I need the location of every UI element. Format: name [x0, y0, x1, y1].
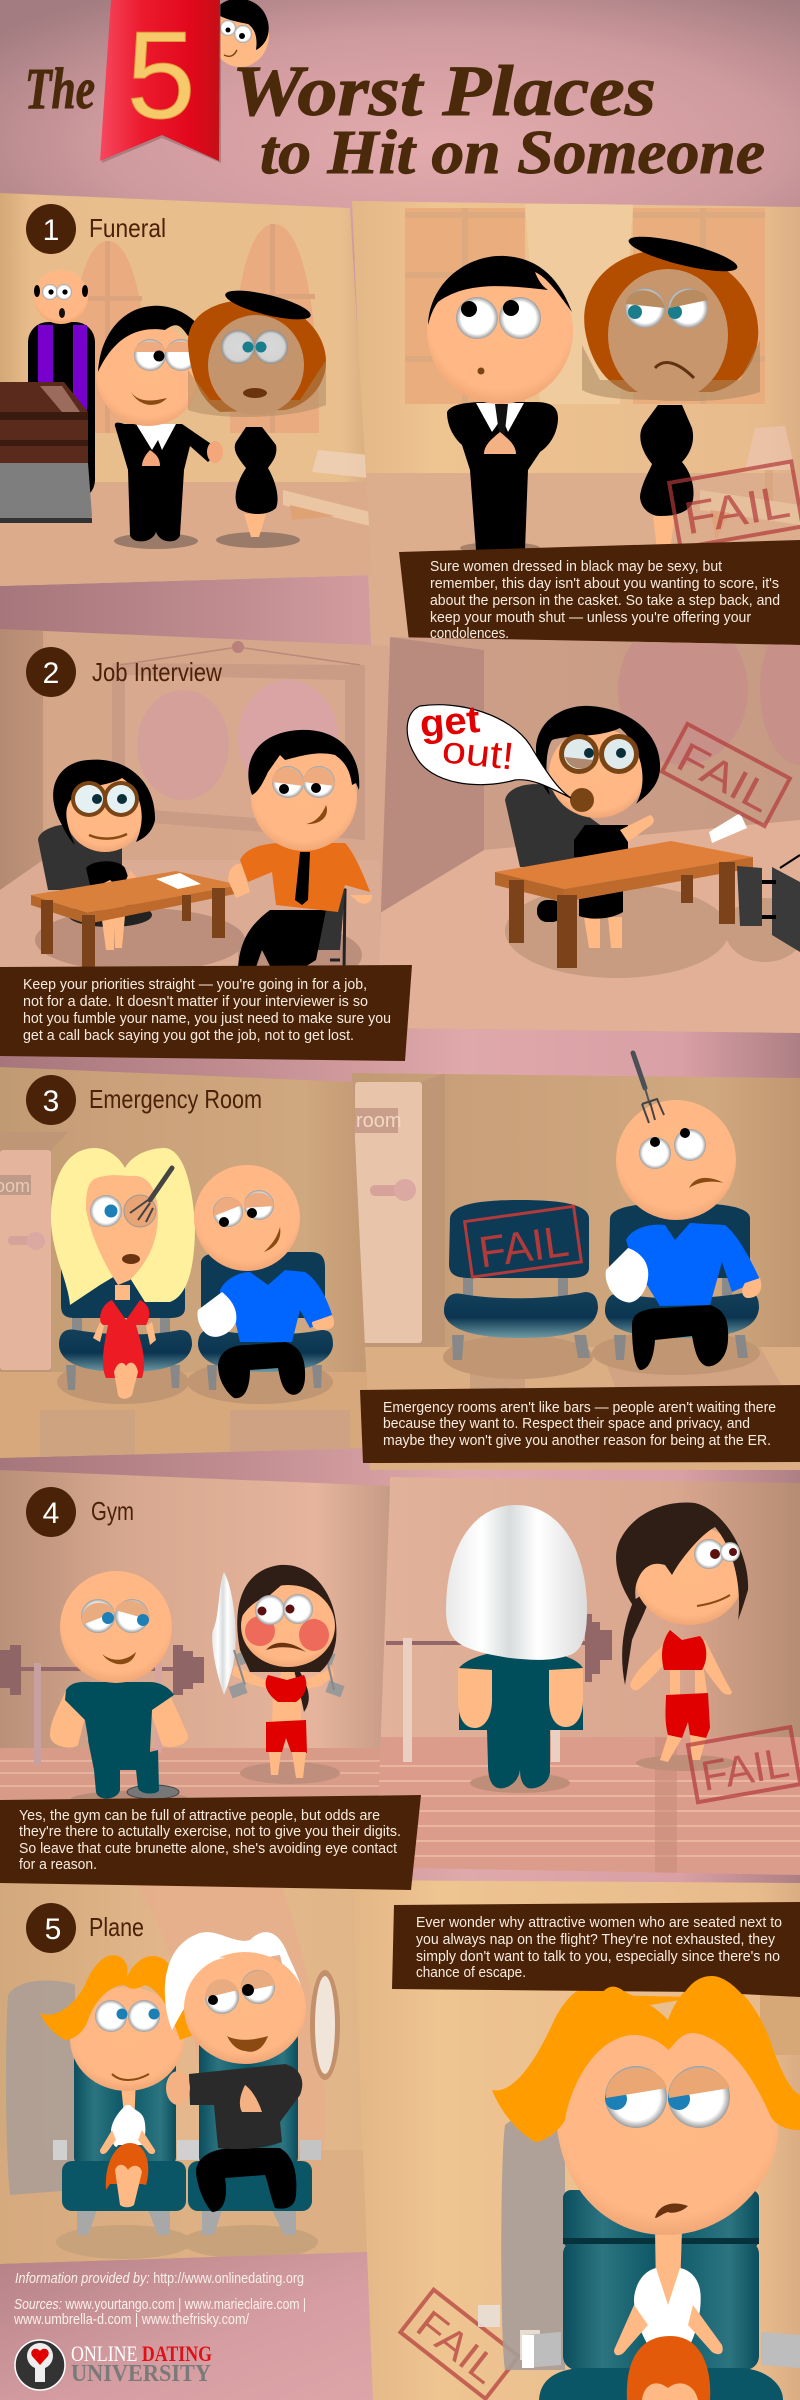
speech bubble text: out!	[440, 729, 516, 778]
number badge 1: 1	[43, 214, 59, 247]
number badge 2	[26, 647, 76, 697]
FAIL stamp: FAIL	[408, 2302, 506, 2392]
empty chair with FAIL stamp: FAIL	[476, 1217, 572, 1278]
panel: job interview left	[0, 629, 390, 967]
brunette woman walking	[616, 1502, 748, 1771]
FAIL stamp	[669, 461, 800, 548]
callout: job interview	[0, 965, 412, 1061]
callout: plane: you always nap on the flight? They're not exhausted, they	[416, 1931, 775, 1948]
callout: gym: Yes, the gym can be full of attractive people, but odds are	[19, 1807, 380, 1824]
callout: plane: Ever wonder why attractive women who are seated next to	[416, 1914, 782, 1931]
FAIL stamp: FAIL	[680, 475, 794, 544]
panel: job interview right	[375, 615, 800, 1040]
FAIL stamp: FAIL	[670, 733, 780, 821]
speech bubble text: get	[418, 699, 482, 746]
heading: Funeral: Funeral	[89, 213, 166, 243]
number badge 4: 4	[43, 1497, 59, 1530]
footer credits: Sources: www.yourtango.com | www.marieclaire.com |	[14, 2296, 306, 2313]
panel: plane left	[0, 1875, 375, 2270]
panel: plane right	[345, 1875, 800, 2400]
orange-haired woman	[40, 1955, 194, 2207]
number badge 3: 3	[43, 1085, 59, 1118]
man facing forward	[427, 256, 573, 554]
callout: gym: for a reason.	[19, 1856, 97, 1873]
panel: emergency room right: room	[356, 1110, 402, 1132]
callout: job interview: not for a date. It doesn't matter if your interviewer is so	[23, 993, 368, 1010]
number badge 5	[26, 1903, 76, 1953]
title: to Hit on Someone	[260, 119, 765, 187]
panel: emergency room left	[0, 1060, 380, 1465]
chair at right edge	[737, 855, 800, 952]
callout: emergency room: maybe they won't give you another reason for being at the ER.	[383, 1432, 771, 1449]
number badge 3	[26, 1075, 76, 1125]
callout: funeral: keep your mouth shut — unless you're offering your	[430, 609, 751, 626]
heading: Emergency Room: Emergency Room	[89, 1084, 262, 1114]
callout: job interview: get a call back saying you got the job, not to get lost.	[23, 1027, 354, 1044]
callout: job interview: Keep your priorities straight — you're going in for a job,	[23, 976, 367, 993]
callout: gym	[0, 1795, 421, 1890]
FAIL stamp	[662, 724, 790, 826]
woman being hit on	[188, 285, 326, 537]
man in teal shirt	[50, 1571, 190, 1809]
big seat	[522, 2190, 800, 2400]
footer credits: www.umbrella-d.com | www.thefrisky.com/	[13, 2311, 250, 2328]
callout: emergency room: because they want to. Respect their space and privacy, and	[383, 1415, 750, 1432]
callout: funeral: remember, this day isn't about you wanting to score, it's	[430, 575, 779, 592]
title: Worst Places	[232, 51, 656, 131]
callout: job interview: hot you fumble your name, you just need to make sure you	[23, 1010, 391, 1027]
interviewer	[31, 760, 362, 985]
background grey seats	[6, 1981, 75, 2195]
FAIL stamp	[688, 1727, 800, 1802]
title	[25, 0, 765, 187]
background grey seats	[478, 2117, 565, 2370]
blonde woman with fork in eye	[51, 1148, 195, 1404]
interviewer, speech bubble, desk	[407, 705, 800, 978]
white-haired man	[165, 1932, 306, 2212]
woman in black hat	[582, 230, 760, 550]
title text: The	[25, 56, 95, 121]
panel: funeral left	[0, 190, 380, 592]
panel: funeral right	[340, 195, 800, 665]
heading: Plane: Plane	[89, 1912, 144, 1942]
big woman with orange hair	[492, 1976, 800, 2400]
orange hair tips over plane callout	[600, 1976, 745, 2005]
heading: Gym: Gym	[91, 1496, 134, 1526]
man from behind, white hair	[446, 1505, 587, 1793]
callout: gym: they're there to actutally exercise, not to give you their digits.	[19, 1823, 401, 1840]
barbell	[386, 1614, 612, 1762]
barbell	[0, 1645, 204, 1765]
aeroplane seats	[53, 2029, 321, 2259]
callout: funeral: Sure women dressed in black may be sexy, but	[430, 558, 723, 575]
footer credits	[13, 2270, 306, 2328]
heading: Job Interview: Job Interview	[92, 657, 222, 687]
title band background	[0, 0, 800, 260]
callout: funeral: about the person in the casket. So take a step back, and	[430, 592, 780, 609]
fork in man's head	[633, 1053, 664, 1123]
callout: plane: simply don't want to talk to you, especially since there's no	[416, 1948, 780, 1965]
character peeking behind ribbon	[211, 0, 269, 67]
callout: plane	[392, 1902, 800, 1997]
panel: gym right	[375, 1470, 800, 1880]
man with cast looking at woman	[187, 1165, 334, 1404]
man with fork in head	[592, 1100, 761, 1375]
number badge 5: 5	[45, 1913, 61, 1946]
panel: emergency room right	[345, 1070, 800, 1477]
number badge 2: 2	[43, 657, 59, 690]
FAIL stamp	[400, 2290, 519, 2399]
callout: plane: chance of escape.	[416, 1964, 526, 1981]
number badge 1	[26, 204, 76, 254]
number badge 4	[26, 1487, 76, 1537]
coffin	[0, 382, 92, 523]
callout: funeral: condolences.	[430, 625, 509, 642]
plane window	[310, 1970, 340, 2080]
callout: emergency room: Emergency rooms aren't like bars — people aren't waiting there	[383, 1399, 776, 1416]
FAIL stamp: FAIL	[698, 1738, 792, 1800]
callout: emergency room	[360, 1385, 800, 1463]
towel	[212, 1572, 236, 1695]
panel: gym left	[0, 1465, 395, 1818]
ribbon with number 5	[100, 0, 221, 163]
logo: online dating university: ONLINE DATING	[71, 2341, 212, 2366]
callout: gym: So leave that cute brunette alone, she's avoiding eye contact	[19, 1840, 398, 1857]
empty chair with FAIL stamp	[443, 1200, 598, 1379]
bench	[283, 450, 370, 526]
speech bubble text	[418, 699, 516, 778]
man hitting on woman	[96, 306, 300, 549]
logo: online dating university: UNIVERSITY	[71, 2361, 211, 2387]
callout: funeral	[399, 540, 800, 659]
logo: online dating university	[15, 2340, 212, 2390]
footer credits: Information provided by: http://www.onlinedating.org	[15, 2270, 304, 2287]
man in orange shirt	[228, 730, 372, 970]
lamp and bench in background	[700, 426, 800, 540]
ribbon with number 5: 5	[127, 7, 195, 145]
woman lifting dumbbells	[228, 1565, 345, 1784]
priest	[28, 270, 95, 500]
footer	[0, 2252, 373, 2400]
